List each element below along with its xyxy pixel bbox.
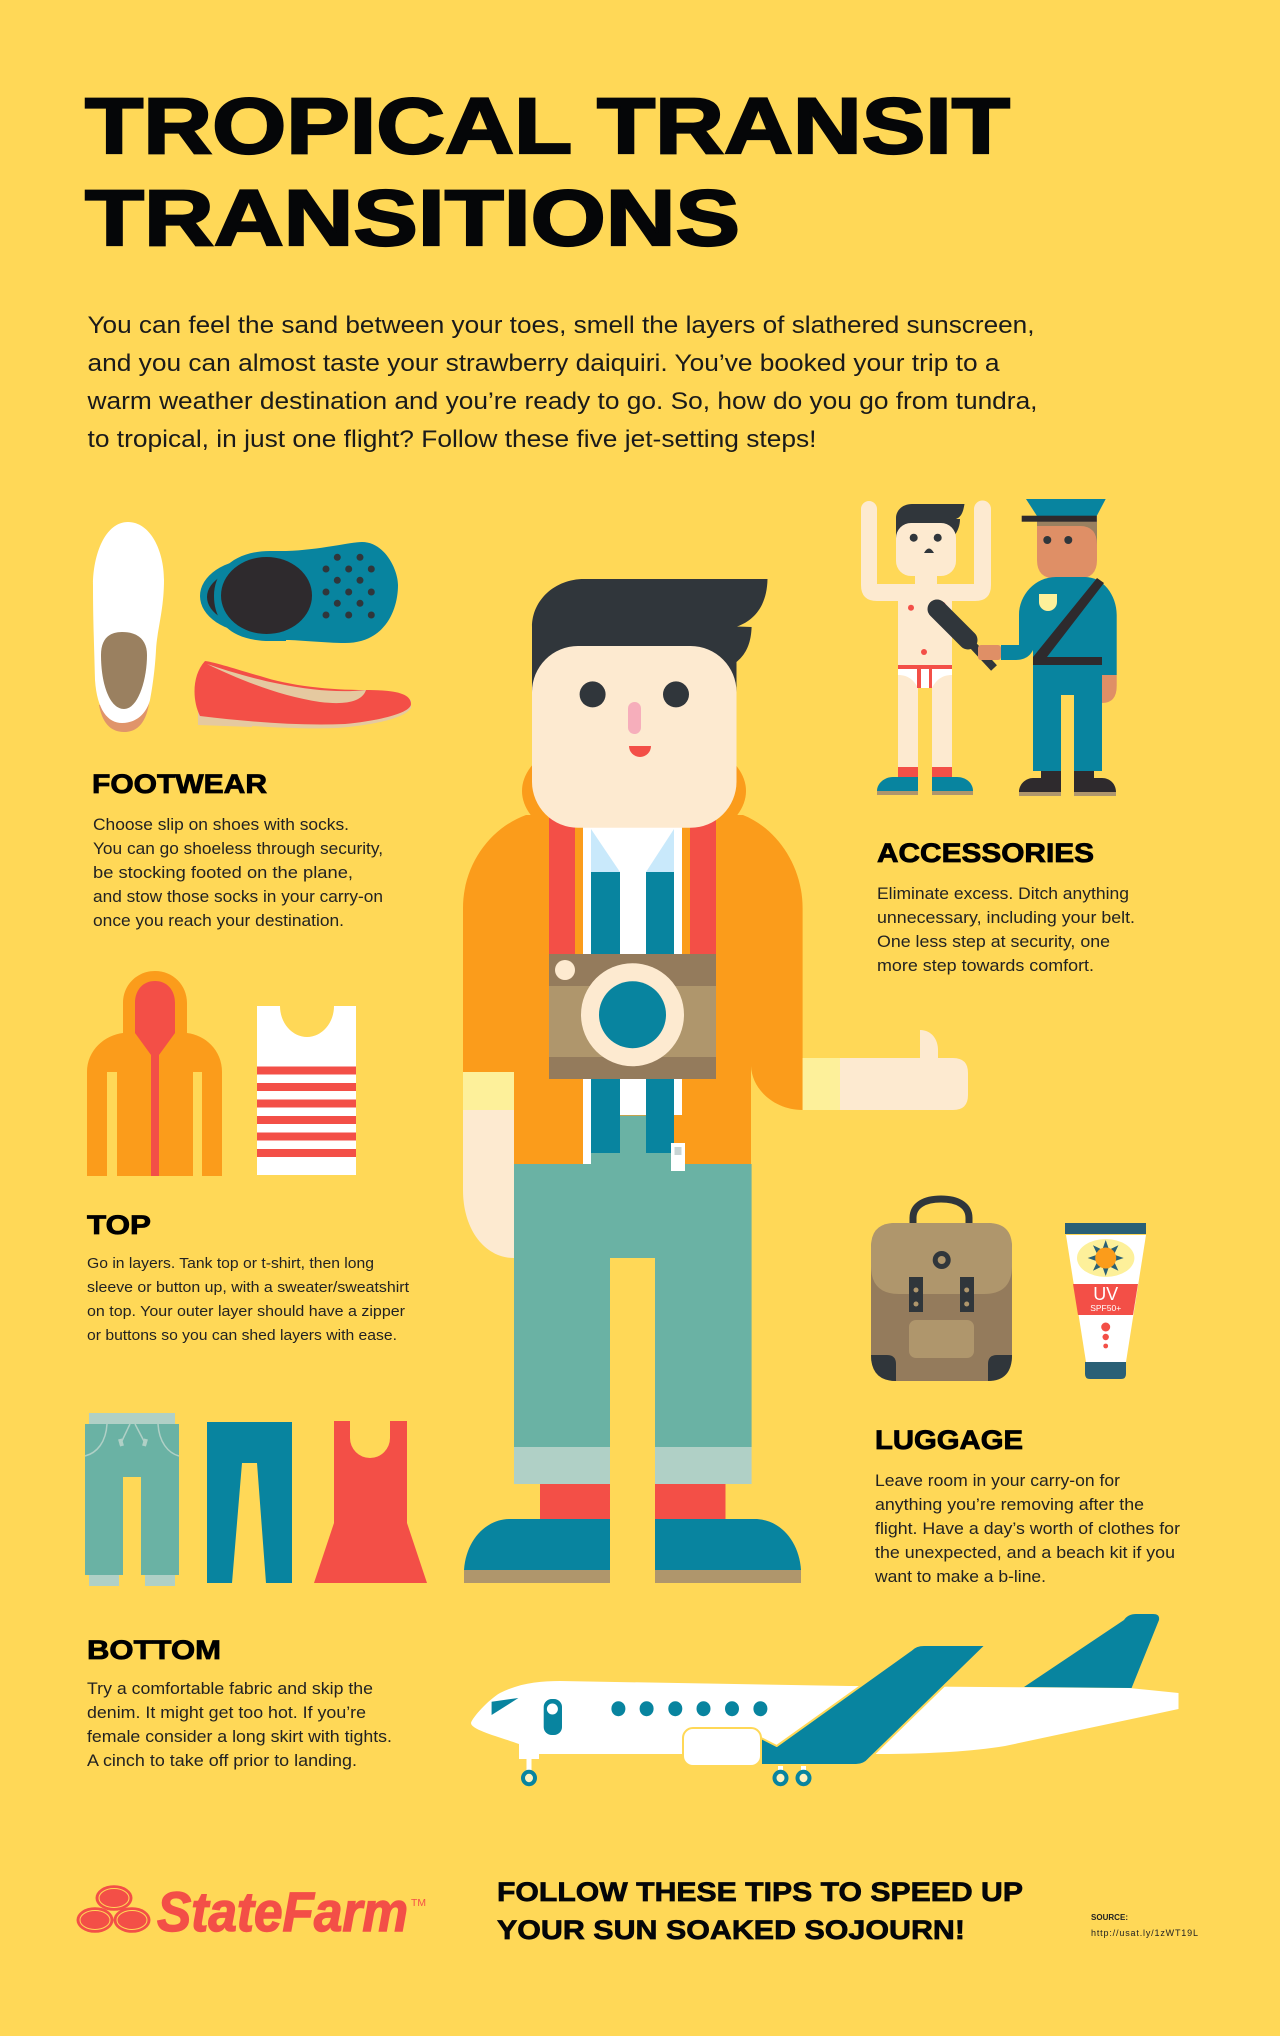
- cockpit window: [492, 1698, 518, 1715]
- text block: luggage: [874, 1472, 1181, 1586]
- heading: top: TOP: [87, 1210, 151, 1240]
- red socks: [540, 1484, 726, 1521]
- icon: sunscreen tube: [1065, 1223, 1146, 1379]
- icon: orange hoodie: [87, 971, 222, 1176]
- text block: bottom: Try a comfortable fabric and skip the: [87, 1680, 373, 1698]
- icon: white slip-on shoe: [93, 522, 164, 732]
- green trousers: [514, 1116, 752, 1447]
- text block: bottom: denim. It might get too hot. If you’re: [87, 1704, 366, 1722]
- landing gear: [523, 1757, 810, 1784]
- intro text: [86, 312, 1038, 453]
- passenger with arms raised: [861, 500, 991, 795]
- illustration: airplane: [471, 1614, 1178, 1784]
- intro text: to tropical, in just one flight? Follow these five jet-setting steps!: [88, 426, 817, 453]
- icon: red ballet flat: [195, 661, 411, 728]
- hood: [522, 729, 746, 853]
- text block: bottom: [87, 1680, 392, 1770]
- panel: luggage illustrations: [871, 1199, 1146, 1381]
- icon: sunscreen tube: SPF50+: [1090, 1303, 1121, 1313]
- icon: red dress: [314, 1421, 427, 1583]
- text block: bottom: female consider a long skirt with tights.: [87, 1728, 392, 1746]
- cabin door: [544, 1699, 562, 1735]
- source: SOURCE:: [1091, 1913, 1128, 1922]
- text block: footwear: once you reach your destination.: [93, 912, 344, 930]
- text block: luggage: flight. Have a day’s worth of clothes for: [875, 1520, 1181, 1538]
- security wand: [937, 609, 994, 668]
- source: http://usat.ly/1zWT19L: [1091, 1928, 1198, 1938]
- text block: luggage: the unexpected, and a beach kit if you: [875, 1544, 1175, 1562]
- heading: accessories: ACCESSORIES: [877, 838, 1094, 868]
- text block: luggage: Leave room in your carry-on for: [875, 1472, 1121, 1490]
- closing callout: [497, 1877, 1023, 1945]
- text block: accessories: more step towards comfort.: [877, 957, 1094, 975]
- teal shoes: [464, 1519, 801, 1583]
- intro text: and you can almost taste your strawberry daiquiri. You’ve booked your trip to a: [88, 350, 1000, 377]
- text block: footwear: [93, 816, 383, 930]
- thumbs-up hand and cuff: [803, 1030, 968, 1110]
- orange jacket: [463, 815, 803, 1164]
- heading: footwear: FOOTWEAR: [92, 769, 267, 799]
- text block: footwear: and stow those socks in your carry-on: [93, 888, 383, 906]
- main wing: [761, 1645, 986, 1765]
- heading: luggage: LUGGAGE: [875, 1425, 1023, 1455]
- tail fin: [1024, 1614, 1159, 1688]
- source: [1091, 1913, 1198, 1938]
- text block: luggage: anything you’re removing after the: [875, 1496, 1144, 1514]
- security officer: [978, 499, 1117, 796]
- icon: sunscreen tube: UV: [1093, 1284, 1118, 1304]
- heading: bottom: BOTTOM: [87, 1635, 221, 1665]
- text block: accessories: One less step at security, one: [877, 933, 1110, 951]
- text block: bottom: A cinch to take off prior to landing.: [87, 1752, 357, 1770]
- text block: top: Go in layers. Tank top or t-shirt, then long: [87, 1255, 374, 1272]
- title: TRANSITIONS: [85, 173, 740, 262]
- closing callout: YOUR SUN SOAKED SOJOURN!: [497, 1915, 965, 1945]
- trademark: TM: [411, 1898, 426, 1909]
- logo ovals: [76, 1885, 150, 1933]
- hair: [532, 579, 768, 700]
- intro text: warm weather destination and you’re ready to go. So, how do you go from tundra,: [86, 388, 1038, 415]
- passenger windows: [611, 1701, 767, 1716]
- camera: [549, 954, 716, 1079]
- text block: footwear: be stocking footed on the plane,: [93, 864, 353, 882]
- logo wordmark: StateFarm: [157, 1880, 408, 1943]
- text block: top: or buttons so you can shed layers with ease.: [87, 1327, 397, 1344]
- zipper pull: [671, 1143, 685, 1171]
- panel: top illustrations: [87, 971, 356, 1176]
- text block: luggage: want to make a b-line.: [874, 1568, 1046, 1586]
- title: TROPICAL TRANSIT: [85, 81, 1010, 170]
- text block: footwear: Choose slip on shoes with socks.: [93, 816, 349, 834]
- text block: top: on top. Your outer layer should have a zipper: [87, 1303, 405, 1320]
- panel: security illustration: [861, 499, 1117, 796]
- icon: teal clog: [200, 542, 398, 643]
- title: [85, 81, 1010, 262]
- intro text: You can feel the sand between your toes, smell the layers of slathered sunscreen,: [88, 312, 1034, 339]
- text block: top: sleeve or button up, with a sweater/sweatshirt: [87, 1279, 410, 1296]
- closing callout: FOLLOW THESE TIPS TO SPEED UP: [497, 1877, 1023, 1907]
- engine: [683, 1728, 761, 1766]
- left hand and cuff: [463, 1072, 514, 1258]
- face: [532, 646, 736, 828]
- icon: teal leggings: [207, 1422, 292, 1583]
- text block: footwear: You can go shoeless through security,: [93, 840, 383, 858]
- logo: State Farm: [76, 1880, 426, 1943]
- panel: central traveller character: [463, 579, 968, 1583]
- text block: top: [87, 1255, 410, 1344]
- icon: backpack: [871, 1199, 1012, 1381]
- icon: striped tank top: [257, 1006, 356, 1175]
- fuselage: [471, 1681, 1178, 1759]
- text block: accessories: Eliminate excess. Ditch anything: [877, 885, 1129, 903]
- camera straps: [549, 810, 716, 960]
- text block: accessories: [877, 885, 1135, 975]
- shirt with collar: [583, 825, 682, 1164]
- panel: footwear illustrations: [93, 522, 411, 732]
- icon: green joggers: [85, 1413, 179, 1586]
- text block: accessories: unnecessary, including your belt.: [877, 909, 1135, 927]
- panel: bottom illustrations: [85, 1413, 427, 1586]
- rolled trouser cuffs: [514, 1447, 752, 1484]
